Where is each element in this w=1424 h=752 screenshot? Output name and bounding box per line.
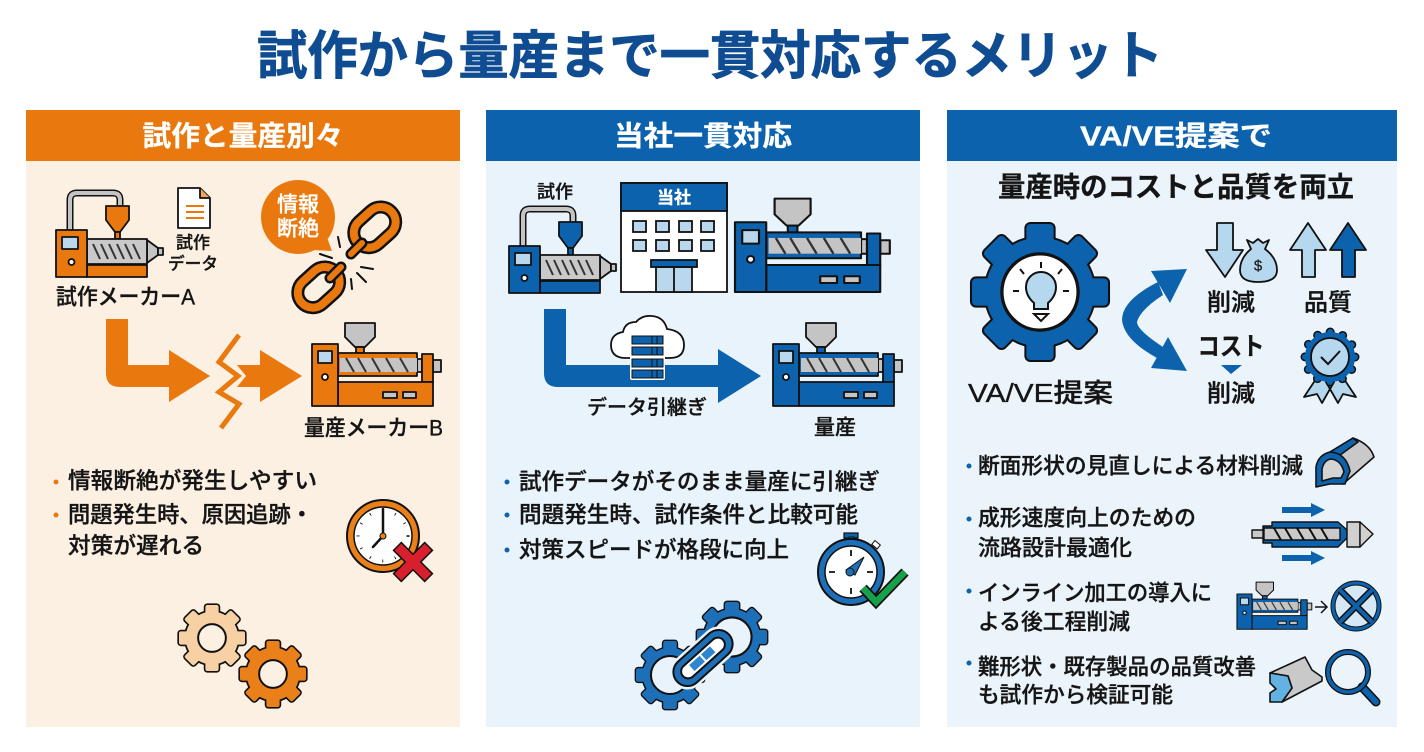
text block: merits xyxy=(504,468,880,562)
text block: measure 3 xyxy=(966,580,1212,634)
icon: inline machine xyxy=(1237,582,1312,629)
text block: measure 2: 流路設計最適化 xyxy=(978,536,1132,560)
icon: extrusion profile xyxy=(1316,438,1374,487)
label: prototype data xyxy=(168,234,218,274)
label: reduction 2: 削減 xyxy=(1207,380,1255,408)
icon: screw with flow arrows xyxy=(1252,503,1373,565)
icon: cloud with server xyxy=(611,316,684,380)
label: VA/VE proposal: VA/VE提案 xyxy=(968,378,1113,408)
arrow: handoff part 2 xyxy=(237,350,302,402)
text block: demerits xyxy=(54,468,317,558)
text block: demerits: 問題発生時、原因追跡・ xyxy=(68,502,313,528)
title: 試作から量産まで一貫対応するメリット xyxy=(257,28,1163,86)
text block: demerits: 対策が遅れる xyxy=(68,534,204,558)
label: maker A: 試作メーカーA xyxy=(56,284,195,310)
text block: measure 4 xyxy=(966,654,1256,708)
icon: prototype machine xyxy=(509,209,616,293)
label: mass production: 量産 xyxy=(814,416,856,440)
icon: broken chain xyxy=(292,201,402,314)
icon: mass-production machine small xyxy=(773,323,902,406)
panel header: VA/VE: VA/VE提案で xyxy=(1080,120,1272,152)
panel header: integrated xyxy=(486,110,920,161)
panel: VA/VE proposal xyxy=(947,110,1397,727)
text block: measure 2 xyxy=(966,506,1196,560)
icon: magnifier xyxy=(1328,652,1376,702)
text block: demerits: 情報断絶が発生しやすい xyxy=(68,468,317,494)
label: quality: 品質 xyxy=(1304,290,1352,316)
icon: disconnected gears xyxy=(179,605,306,707)
text block: measure 4: も試作から検証可能 xyxy=(978,682,1173,708)
icon: document xyxy=(178,188,210,228)
panel header: separate xyxy=(26,110,460,161)
icon: profile sample xyxy=(1270,657,1322,702)
text block: merits: 対策スピードが格段に向上 xyxy=(519,538,789,562)
label: prototype data: データ xyxy=(168,254,218,274)
panel header: separate: 試作と量産別々 xyxy=(142,120,344,152)
panel: our integrated support xyxy=(486,110,920,727)
icon: no post-process xyxy=(1333,583,1379,629)
text block: measure 1: 断面形状の見直しによる材料削減 xyxy=(978,454,1303,478)
label: maker B: 量産メーカーB xyxy=(304,416,443,440)
text block: measure 2: 成形速度向上のための xyxy=(978,506,1196,530)
callout: information break: 情報 xyxy=(277,194,319,216)
text block: measure 4: 難形状・既存製品の品質改善 xyxy=(978,654,1256,680)
label: prototype: 試作 xyxy=(537,182,573,202)
icon: small arrow xyxy=(1315,601,1327,613)
callout: information break xyxy=(261,180,335,254)
text block: measure 3: インライン加工の導入に xyxy=(978,580,1212,606)
icon: cost down with money bag: $ xyxy=(1254,258,1263,274)
icon: gears joined by link xyxy=(636,602,767,709)
panel header: VA/VE xyxy=(947,110,1397,161)
icon: stopwatch with check xyxy=(818,533,905,605)
callout: information break: 断絶 xyxy=(277,218,319,240)
panel header: integrated: 当社一貫対応 xyxy=(614,120,792,152)
arrow: data handoff xyxy=(544,309,761,403)
icon: lightning break xyxy=(219,335,239,428)
label: reduction: 削減 xyxy=(1207,290,1255,316)
icon: company building: 当社 xyxy=(657,188,691,208)
icon: quality up arrows xyxy=(1290,223,1366,277)
label: cost: コスト xyxy=(1198,333,1264,361)
panel: separate prototype and mass-production makers xyxy=(26,110,460,727)
text block: merits: 問題発生時、試作条件と比較可能 xyxy=(519,502,858,528)
icon: prototype machine A xyxy=(56,193,163,277)
icon: company building xyxy=(621,183,727,292)
text block: merits: 試作データがそのまま量産に引継ぎ xyxy=(519,468,880,494)
icon: cost down with money bag xyxy=(1206,223,1277,282)
icon: mass-production machine large xyxy=(735,199,890,292)
subheading: 量産時のコストと品質を両立 xyxy=(998,172,1354,202)
icon: gear with light bulb xyxy=(972,224,1108,360)
arrow: handoff part 1 xyxy=(106,319,210,402)
icon: down triangle xyxy=(1221,365,1242,374)
icon: clock with cross xyxy=(347,500,444,593)
text block: measure 3: よる後工程削減 xyxy=(978,610,1130,634)
label: data handoff: データ引継ぎ xyxy=(587,395,707,419)
icon: mass-production machine B xyxy=(312,323,441,406)
arrow: curved split xyxy=(1122,269,1187,371)
icon: quality badge xyxy=(1304,332,1356,403)
label: prototype data: 試作 xyxy=(176,234,210,252)
